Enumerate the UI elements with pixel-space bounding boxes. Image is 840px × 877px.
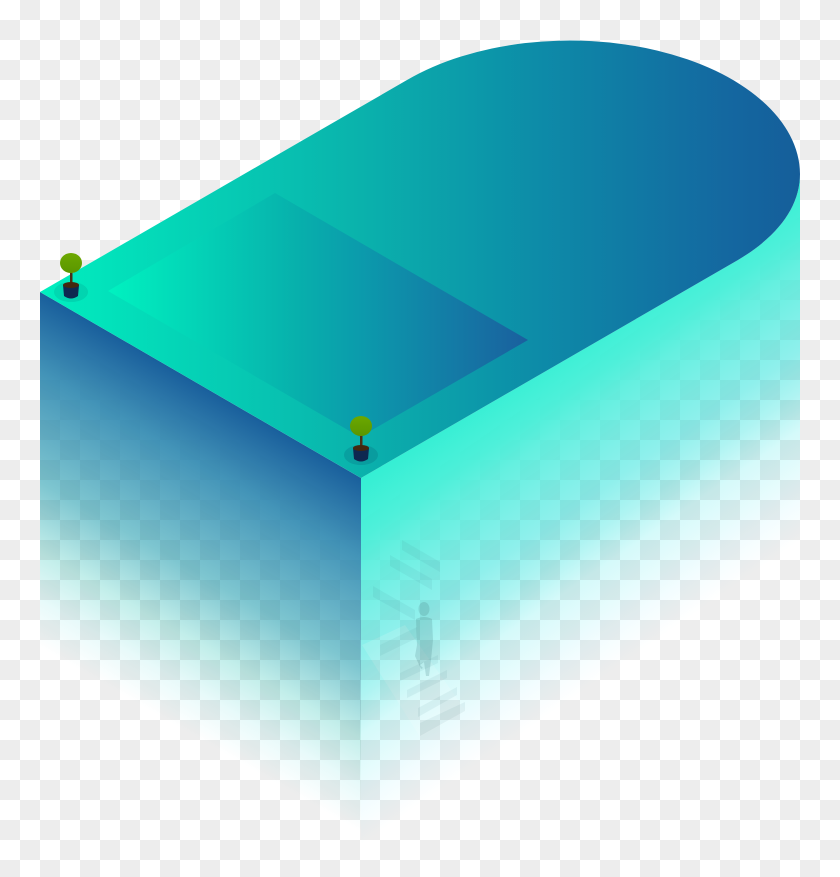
icon: left potted plant bbox=[54, 253, 88, 302]
top face of block bbox=[40, 41, 800, 478]
icon: right potted plant bbox=[344, 416, 378, 465]
left face of block bbox=[40, 292, 361, 877]
faded walking person bbox=[415, 602, 433, 676]
right face of block bbox=[361, 174, 800, 877]
inner rectangle on top face bbox=[108, 193, 528, 437]
faded staircase bbox=[362, 540, 466, 737]
